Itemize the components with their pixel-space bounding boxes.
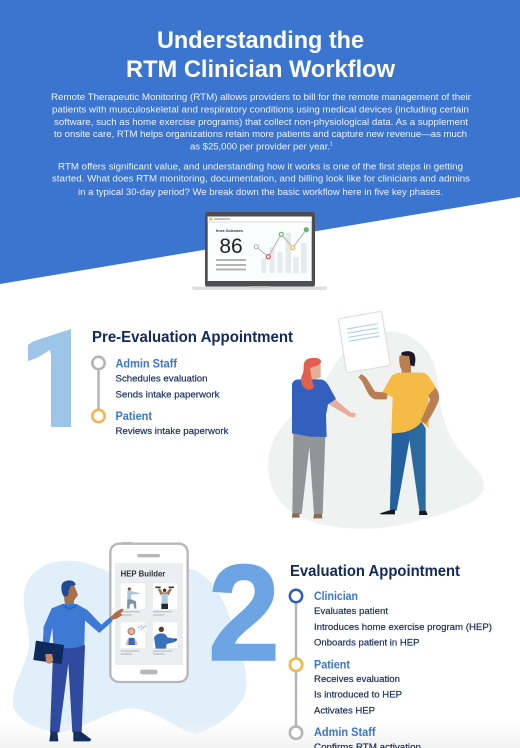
woman — [292, 358, 356, 518]
card figure: lunge — [127, 587, 139, 609]
laptop dashboard illustration — [192, 212, 327, 290]
numeral 2: 2 — [208, 537, 280, 690]
intro paragraph 1: software, such as home exercise programs) that collect non-physiological data. As a supplement — [54, 117, 468, 128]
role: patient: Reviews intake paperwork — [116, 426, 229, 437]
exercise cards — [121, 583, 177, 655]
intro paragraph 1: as $25,000 per provider per year. — [190, 142, 330, 152]
role: patient: Patient — [314, 658, 350, 672]
phone — [110, 542, 188, 682]
role: clinician: Introduces home exercise program (HEP) — [314, 622, 492, 633]
background blob — [13, 561, 246, 734]
role: clinician: Evaluates patient — [314, 606, 388, 617]
numeral 1: 1 — [19, 300, 97, 457]
role: admin staff: Schedules evaluation — [116, 374, 208, 385]
title — [126, 27, 395, 83]
card figure: overhead press — [155, 587, 174, 609]
marker: admin staff — [290, 726, 302, 739]
man with yellow shirt — [358, 351, 439, 515]
intro paragraph 1 — [51, 92, 472, 152]
heading: evaluation appointment: Evaluation Appointment — [290, 563, 461, 580]
role: patient: Activates HEP — [314, 706, 375, 717]
role: admin staff: Admin Staff — [314, 725, 376, 739]
background blob — [268, 331, 484, 529]
role: patient: Receives evaluation — [314, 674, 400, 685]
marker: admin staff — [92, 357, 105, 369]
marker: patient — [290, 658, 302, 671]
card figure: patient with speech bubble — [126, 624, 148, 645]
illustration: clinician presenting HEP builder on phone — [0, 542, 520, 748]
intro paragraph 1: Remote Therapeutic Monitoring (RTM) allows providers to bill for the remote management of their — [51, 92, 472, 103]
clinician figure — [33, 580, 124, 741]
title: Understanding the — [157, 27, 364, 54]
bottom page fade — [0, 720, 520, 748]
role: patient — [314, 658, 402, 717]
role: patient — [116, 409, 229, 437]
card figure: therapist — [154, 627, 177, 649]
intro paragraph 1: to onsite care, RTM helps organizations retain more patients and capture new revenue—as much — [54, 129, 467, 140]
role: clinician: Onboards patient in HEP — [314, 638, 420, 649]
role: admin staff — [116, 356, 220, 401]
intro paragraph 2: in a typical 30-day period? We break down the basic workflow here in five key phases. — [78, 187, 443, 198]
role: admin staff — [314, 725, 421, 748]
illustration: two people reviewing paperwork — [268, 312, 484, 529]
laptop dashboard illustration: Knee Outcomes — [216, 229, 243, 233]
role: admin staff: Admin Staff — [116, 356, 178, 370]
marker: patient — [92, 410, 105, 422]
screen title: HEP Builder — [121, 570, 165, 579]
timeline: phase 1 — [92, 356, 229, 437]
heading: pre-evaluation appointment: Pre-Evaluation Appointment — [92, 329, 294, 346]
intro paragraph 1: 1 — [330, 142, 333, 148]
marker: clinician — [290, 590, 302, 602]
role: patient: Patient — [116, 409, 152, 423]
header background — [0, 0, 520, 284]
laptop dashboard illustration: 86 — [219, 235, 243, 258]
intro paragraph 2: RTM offers significant value, and understanding how it works is one of the first steps in getting — [58, 162, 463, 172]
role: patient: Is introduced to HEP — [314, 690, 402, 701]
role: clinician — [314, 589, 492, 649]
paper — [339, 312, 390, 372]
title: RTM Clinician Workflow — [126, 56, 395, 83]
role: clinician: Clinician — [314, 589, 358, 603]
role: admin staff: Sends intake paperwork — [116, 390, 220, 401]
intro paragraph 2 — [52, 162, 470, 198]
timeline: phase 2 — [290, 589, 492, 748]
intro paragraph 2: started. What does RTM monitoring, documentation, and billing look like for clinicians and admins — [52, 174, 470, 184]
intro paragraph 1: patients with musculoskeletal and respiratory conditions using medical devices (including certain — [52, 104, 469, 116]
